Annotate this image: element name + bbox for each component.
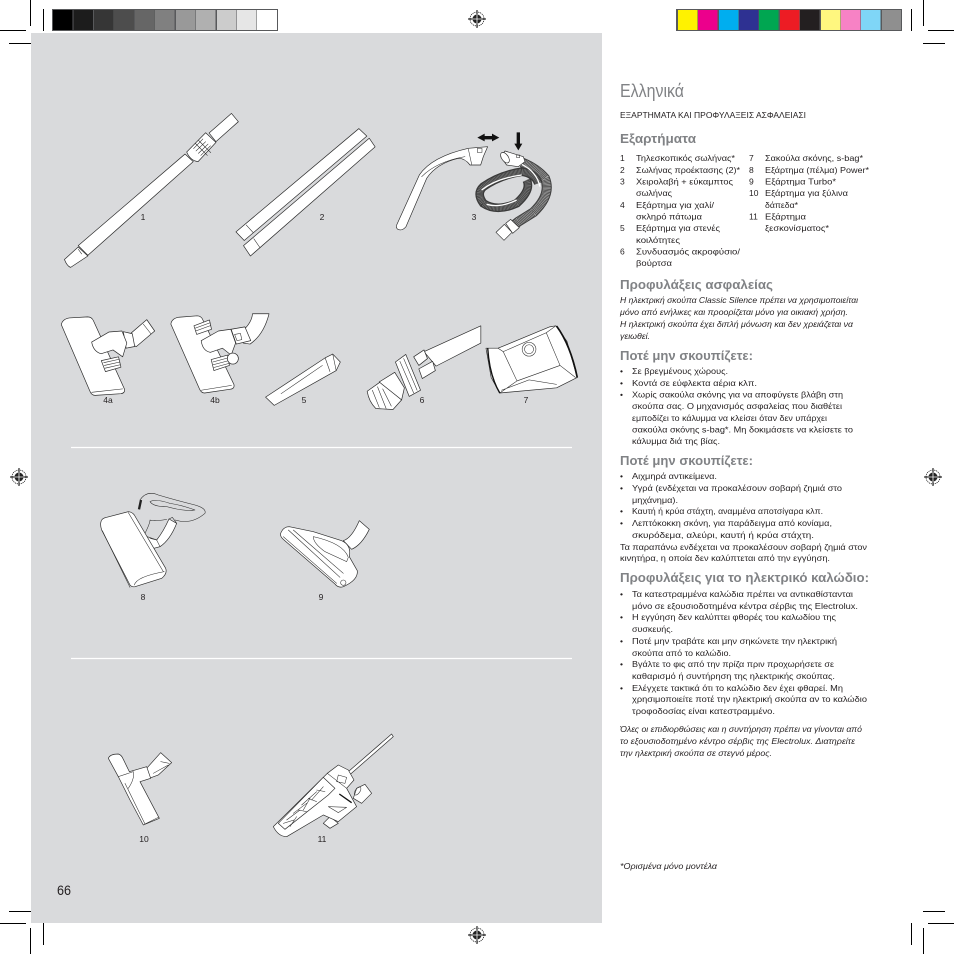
registration mark left <box>10 468 28 486</box>
text block: parts list column 1: σωλήνας <box>636 188 672 198</box>
label 7: 7 <box>524 395 529 405</box>
registration mark bottom <box>468 926 486 944</box>
text block: parts list column 1: Σωλήνας προέκτασης (2)* <box>636 165 741 175</box>
text block: never vacuum list 1: εμποδίζει το κάλυμμα να κλείσει όταν δεν υπάρχει <box>632 413 827 423</box>
icon: dusting tool <box>273 734 393 837</box>
text block: parts list column 2: Εξάρτημα <box>765 212 806 222</box>
text block: never vacuum list 2: • <box>620 483 623 493</box>
text block: parts list column 2: δάπεδα* <box>765 200 799 210</box>
heading: power cord precautions: Προφυλάξεις για το ηλεκτρικό καλώδιο: <box>620 570 869 585</box>
icon: parquet nozzle <box>108 753 172 825</box>
text block: safety intro: Η ηλεκτρική σκούπα Classic Silence πρέπει να χρησιμοποιείται <box>620 295 858 305</box>
text block: parts list column 1: 3 <box>620 176 625 186</box>
text block: parts list column 2: Εξάρτημα Turbo* <box>765 176 837 186</box>
arrow: down <box>514 132 522 150</box>
label 1: 1 <box>141 212 146 222</box>
icon: power nozzle with cable <box>101 493 205 587</box>
text block: safety intro: μόνο από ενήλικες και προορίζεται μόνο για οικιακή χρήση. <box>619 307 848 317</box>
text block: service note <box>619 724 862 758</box>
text block: never vacuum list 1: • <box>620 378 623 388</box>
text block: never vacuum list 2: κινητήρα, η οποία δεν καλύπτεται από την εγγύηση. <box>620 553 830 563</box>
title: Ελληνικά <box>620 81 684 101</box>
text block: power cord list: Ελέγχετε τακτικά ότι το καλώδιο δεν έχει φθαρεί. Μη <box>632 683 843 693</box>
footnote: *Ορισμένα μόνο μοντέλα <box>620 861 718 871</box>
label 8: 8 <box>141 592 146 602</box>
text block: safety intro: Η ηλεκτρική σκούπα έχει διπλή μόνωση και δεν χρειάζεται να <box>620 319 854 329</box>
illustration row 3: power and turbo nozzles <box>101 493 369 587</box>
label 3: 3 <box>472 212 477 222</box>
text block: never vacuum list 2: Καυτή ή κρύα στάχτη, αναμμένα αποτσίγαρα κλπ. <box>632 506 823 516</box>
illustration row 2: nozzles and bag <box>61 314 577 410</box>
text block: service note: το εξουσιοδοτημένο κέντρο σέρβις της Electrolux. Διατηρείτε <box>620 736 855 746</box>
text block: power cord list <box>620 589 867 716</box>
text block: parts list column 1: 2 <box>620 165 625 175</box>
heading: accessories: Εξαρτήματα <box>620 131 696 146</box>
text block: parts list column 2: 10 <box>749 188 759 198</box>
text block: power cord list: Βγάλτε το φις από την πρίζα πριν προχωρήσετε σε <box>632 659 834 669</box>
label 4b: 4b <box>210 395 220 405</box>
text block: power cord list: χρησιμοποιείτε ποτέ την ηλεκτρική σκούπα αν το καλώδιο <box>632 694 867 704</box>
text block: parts list column 1: Χειρολαβή + εύκαμπτος <box>636 176 733 186</box>
text block: never vacuum list 2: • <box>620 471 623 481</box>
arrow: double horizontal <box>477 134 499 141</box>
text block: never vacuum list 1: σκούπα σας. Ο μηχανισμός ασφαλείας που διαθέτει <box>632 401 842 411</box>
label 4a: 4a <box>103 395 113 405</box>
label 6: 6 <box>420 395 425 405</box>
text block: never vacuum list 1: Σε βρεγμένους χώρους. <box>632 366 728 376</box>
text block: never vacuum list 2 <box>620 471 867 563</box>
text block: parts list column 1: Εξάρτημα για χαλί/ <box>636 200 715 210</box>
text block: service note: Όλες οι επιδιορθώσεις και η συντήρηση πρέπει να γίνονται από <box>619 724 862 734</box>
text block: parts list column 1: σκληρό πάτωμα <box>636 212 702 222</box>
text block: power cord list: Η εγγύηση δεν καλύπτει φθορές του καλωδίου της <box>632 612 836 622</box>
text block: never vacuum list 1: κάλυμμα διά της βίας. <box>632 436 720 446</box>
icon: crevice tool <box>266 354 340 405</box>
process colour bar <box>676 9 902 31</box>
text block: power cord list: μόνο σε εξουσιοδοτημένα κέντρα σέρβις της Electrolux. <box>632 601 858 611</box>
label 5: 5 <box>302 395 307 405</box>
text block: power cord list: • <box>620 612 623 622</box>
text block: never vacuum list 2: Λεπτόκοκκη σκόνη, για παράδειγμα από κονίαμα, <box>632 518 832 528</box>
illustration row 4: parquet nozzle and dusting tool <box>108 734 393 837</box>
icon: nozzle 4b <box>171 314 269 393</box>
icon: dust brush with tube <box>367 326 481 410</box>
text block: parts list column 2 <box>749 153 870 233</box>
text block: power cord list: Ποτέ μην τραβάτε και μην σηκώνετε την ηλεκτρική <box>632 636 837 646</box>
text block: parts list column 2: Εξάρτημα για ξύλινα <box>765 188 848 198</box>
text block: power cord list: σκούπα από το καλώδιο. <box>632 648 731 658</box>
text block: parts list column 2: 11 <box>749 212 758 222</box>
text block: parts list column 1 <box>620 153 741 268</box>
registration mark top <box>468 10 486 28</box>
text block: parts list column 1: Συνδυασμός ακροφύσιο/ <box>636 246 741 256</box>
text block: parts list column 2: 7 <box>749 153 754 163</box>
text block: parts list column 1: Τηλεσκοπικός σωλήνας* <box>636 153 736 163</box>
label 2: 2 <box>320 212 325 222</box>
text block: power cord list: • <box>620 683 623 693</box>
text block: never vacuum list 1: Χωρίς σακούλα σκόνης για να αποφύγετε βλάβη στη <box>632 390 843 400</box>
text block: never vacuum list 2: σκυρόδεμα, αλεύρι, καυτή ή κρύα στάχτη. <box>632 530 814 540</box>
registration mark right <box>924 468 942 486</box>
heading: never vacuum 1: Ποτέ μην σκουπίζετε: <box>620 348 753 363</box>
text block: never vacuum list 1: Κοντά σε εύφλεκτα αέρια κλπ. <box>632 378 757 388</box>
text block: power cord list: συσκευής. <box>632 624 673 634</box>
icon: hose connector top <box>501 151 525 167</box>
text block: power cord list: Τα κατεστραμμένα καλώδια πρέπει να αντικαθίστανται <box>632 589 853 599</box>
text block: parts list column 1: Εξάρτημα για στενές <box>636 223 720 233</box>
icon: handle and flexible hose <box>396 132 547 240</box>
text block: never vacuum list 1: • <box>620 390 623 400</box>
icon: turbo nozzle <box>281 521 369 587</box>
illustration row 1: tubes and hose <box>64 113 547 267</box>
text block: never vacuum list 1: σακούλα σκόνης s-bag*. Μη δοκιμάσετε να κλείσετε το <box>632 424 853 434</box>
text block: parts list column 1: 1 <box>620 153 625 163</box>
icon: hose coils <box>480 162 547 228</box>
text block: parts list column 1: βούρτσα <box>636 258 672 268</box>
text block: parts list column 2: ξεσκονίσματος* <box>765 223 830 233</box>
icon: dust bag <box>486 326 577 393</box>
text block: never vacuum list 1: • <box>620 366 623 376</box>
icon: hose connector bottom <box>506 219 519 233</box>
text block: parts list column 1: 5 <box>620 223 625 233</box>
grayscale colour bar <box>52 9 278 31</box>
text block: parts list column 1: κοιλότητες <box>636 235 680 245</box>
icon: extension tubes <box>236 129 375 256</box>
text block: power cord list: καθαρισμό ή συντήρηση της ηλεκτρικής σκούπας. <box>632 671 835 681</box>
text block: service note: την ηλεκτρική σκούπα σε στεγνό μέρος. <box>620 748 772 758</box>
label 10: 10 <box>139 834 149 844</box>
text block: power cord list: • <box>620 589 623 599</box>
text block: parts list column 2: 9 <box>749 176 754 186</box>
text block: parts list column 1: 4 <box>620 200 625 210</box>
text block: safety intro: γειωθεί. <box>620 331 650 341</box>
icon: telescopic tube <box>64 113 238 267</box>
text block: never vacuum list 2: μηχάνημα). <box>632 495 678 505</box>
label 11: 11 <box>318 834 327 844</box>
text block: power cord list: • <box>620 636 623 646</box>
icon: handle <box>396 147 488 230</box>
heading: never vacuum 2: Ποτέ μην σκουπίζετε: <box>620 453 753 468</box>
text block: never vacuum list 2: Υγρά (ενδέχεται να προκαλέσουν σοβαρή ζημιά στο <box>632 483 842 493</box>
icon: nozzle 4a <box>61 317 155 395</box>
text block: parts list column 2: Σακούλα σκόνης, s-bag* <box>765 153 864 163</box>
text block: never vacuum list 2: Τα παραπάνω ενδέχεται να προκαλέσουν σοβαρή ζημιά στον <box>620 542 867 552</box>
text block: never vacuum list 2: • <box>620 506 623 516</box>
label 9: 9 <box>319 592 324 602</box>
text block: parts list column 1: 6 <box>620 246 625 256</box>
text block: power cord list: • <box>620 659 623 669</box>
text block: never vacuum list 1 <box>620 366 853 446</box>
text block: never vacuum list 2: • <box>620 518 623 528</box>
text block: never vacuum list 2: Αιχμηρά αντικείμενα. <box>632 471 717 481</box>
text block: power cord list: τροφοδοσίας είναι κατεστραμμένο. <box>632 706 775 716</box>
text block: parts list column 2: 8 <box>749 165 754 175</box>
text block: safety intro <box>619 295 858 341</box>
subtitle: ΕΞΑΡΤΗΜΑΤΑ ΚΑΙ ΠΡΟΦΥΛΑΞΕΙΣ ΑΣΦΑΛΕΙΑΣΙ <box>620 111 806 120</box>
panel: grey illustration background <box>31 33 602 923</box>
text block: parts list column 2: Εξάρτημα (πέλμα) Power* <box>765 165 870 175</box>
heading: safety precautions: Προφυλάξεις ασφαλείας <box>620 277 773 292</box>
page number: 66 <box>57 882 71 898</box>
